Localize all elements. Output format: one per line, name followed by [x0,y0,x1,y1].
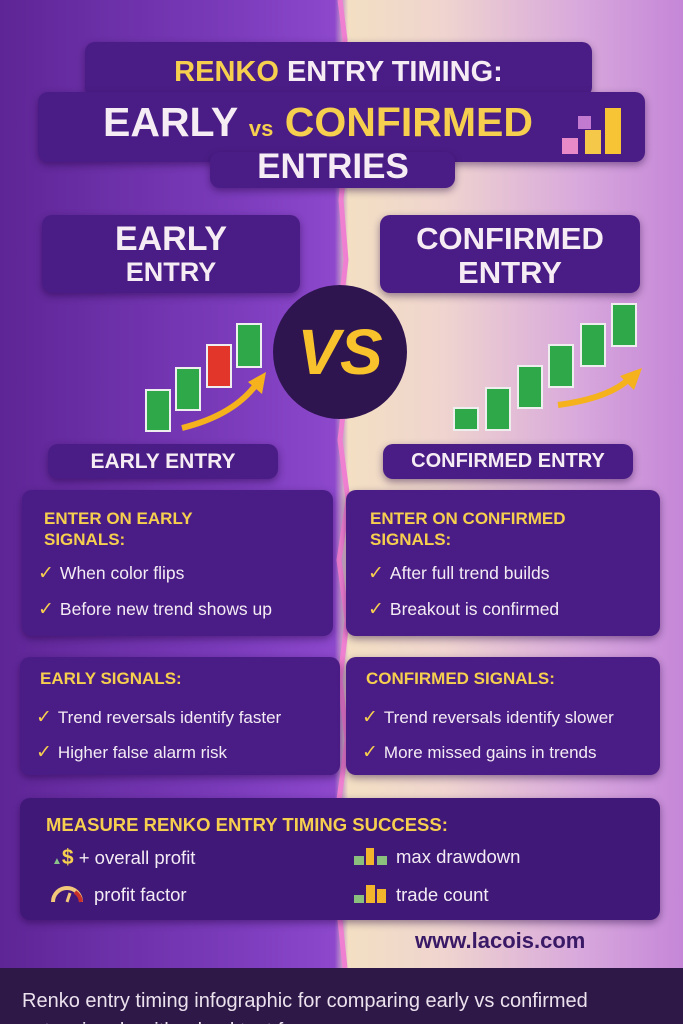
chart: confirmed bricks [453,303,642,431]
vs circle [273,285,407,419]
header: confirmed entry: CONFIRMED [416,221,604,256]
panel: measure success [20,798,660,920]
icon: title bars [562,108,621,154]
panel: confirmed signals: ✓ Trend reversals identify slower [362,707,614,728]
header: confirmed entry [380,215,640,293]
metric: overall profit: ▲$ + overall profit [52,846,195,869]
caption bar [0,968,683,1024]
panel: confirmed signals: CONFIRMED SIGNALS: [366,669,555,688]
panel: enter on early signals: ✓ Before new trend shows up [38,599,272,620]
panel: enter on early signals [22,490,333,636]
vs circle: VS [297,316,383,388]
header: early entry: EARLY [115,220,227,258]
label: early entry [48,444,278,479]
title: ENTRIES [257,147,409,186]
panel: early signals: ✓ Trend reversals identify faster [36,707,281,728]
panel: measure success: MEASURE RENKO ENTRY TIMING SUCCESS: [46,814,448,835]
panel: enter on early signals: SIGNALS: [44,530,125,549]
chart: early bricks [145,323,266,432]
metric: max drawdown: max drawdown [396,846,520,867]
title [34,40,650,196]
metric: profit factor [51,884,187,905]
panel: enter on early signals: ENTER ON EARLY [44,509,193,528]
panel: early signals: ✓ Higher false alarm risk [36,742,227,763]
header: early entry: ENTRY [126,257,216,287]
panel: early signals: EARLY SIGNALS: [40,669,182,688]
title: EARLY vs CONFIRMED [103,99,533,145]
panel: early signals [20,657,340,775]
panel: enter on early signals: ✓ When color flips [38,563,184,584]
panel: enter on confirmed signals: ENTER ON CONFIRMED [370,509,566,528]
website url: www.lacois.com [415,928,585,953]
panel: confirmed signals [346,657,660,775]
panel: enter on confirmed signals: ✓ Breakout is confirmed [368,599,559,620]
label: confirmed entry: CONFIRMED ENTRY [411,450,605,472]
header: early entry [42,215,300,293]
caption bar: Renko entry timing infographic for comparing early vs confirmed [22,990,588,1012]
title: RENKO ENTRY TIMING: [174,56,503,88]
metric: profit factor: profit factor [94,884,187,905]
panel: confirmed signals: ✓ More missed gains in trends [362,742,597,763]
panel: enter on confirmed signals: ✓ After full trend builds [368,563,549,584]
label: confirmed entry [383,444,633,479]
panel: enter on confirmed signals [346,490,660,636]
torn divider [336,0,350,968]
label: early entry: EARLY ENTRY [90,450,236,473]
header: confirmed entry: ENTRY [458,255,562,290]
metric: trade count [354,884,489,905]
panel: enter on confirmed signals: SIGNALS: [370,530,451,549]
metric: trade count: trade count [396,884,489,905]
